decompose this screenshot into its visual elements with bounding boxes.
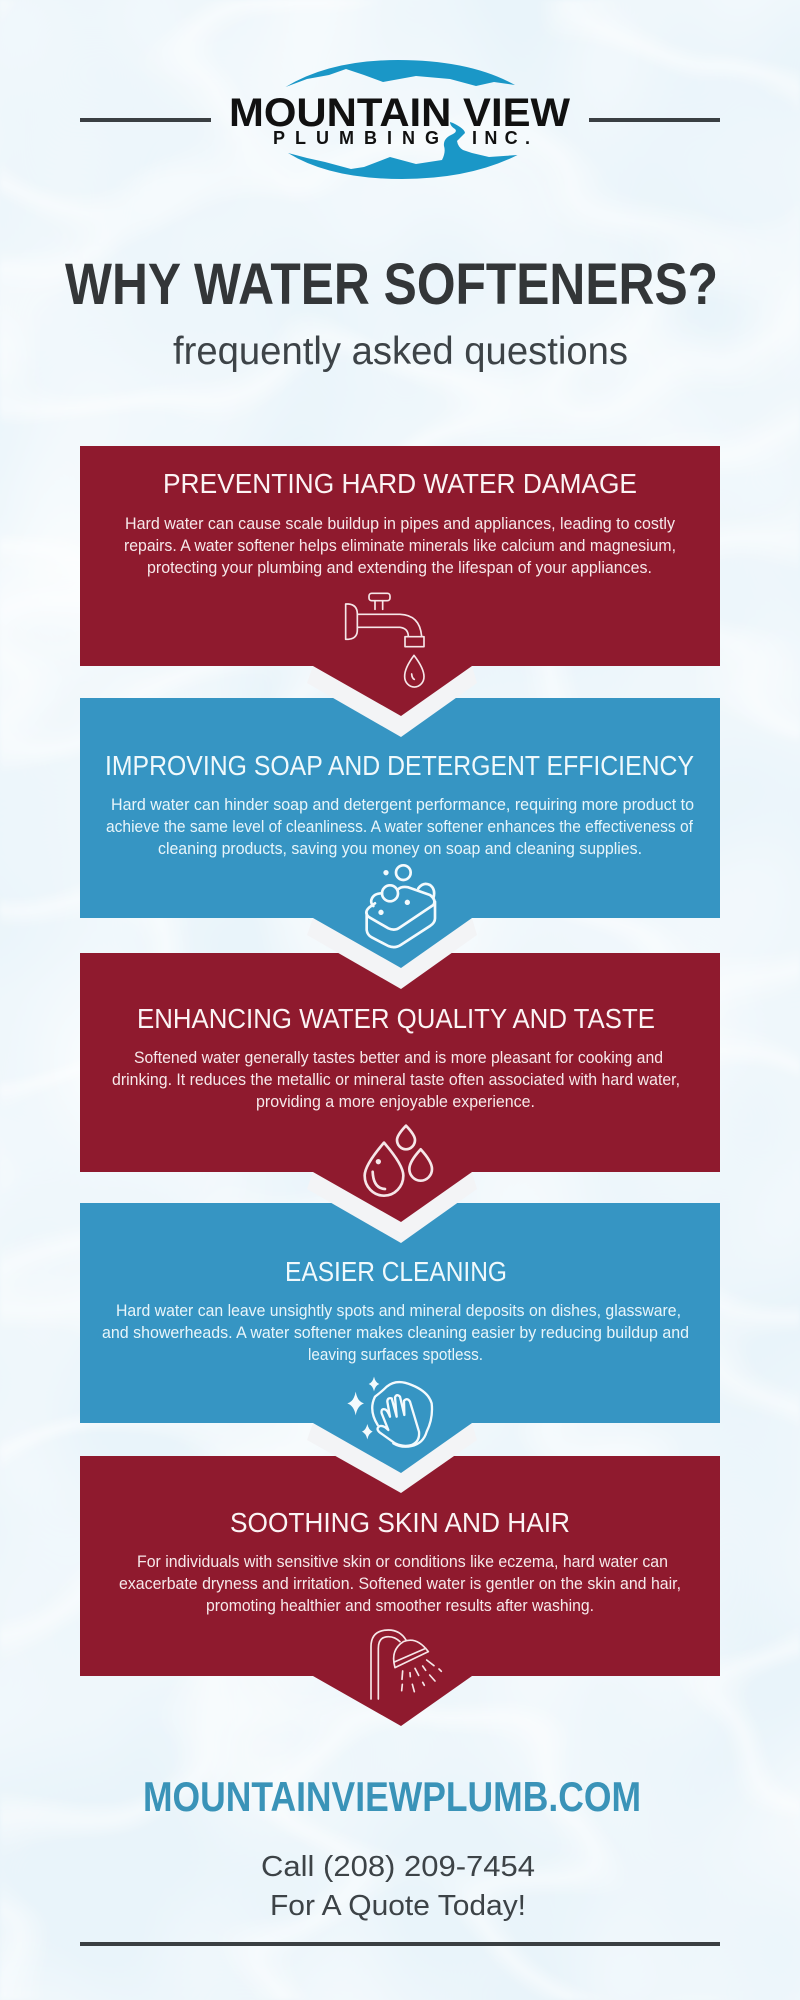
logo: Mountain View Plumbing: PLUMBING (273, 128, 439, 148)
heading: EASIER CLEANING (285, 1256, 507, 1287)
heading: IMPROVING SOAP AND DETERGENT EFFICIENCY (105, 750, 694, 781)
chevron separator 4 (307, 1423, 477, 1493)
call to action: For A Quote Today! (270, 1890, 526, 1922)
body text: drinking. It reduces the metallic or mineral taste often associated with hard water, (112, 1070, 680, 1089)
icon: shower head (371, 1630, 441, 1699)
header: logo with side rules (80, 60, 720, 179)
body text (112, 1048, 680, 1111)
body text (102, 1301, 689, 1364)
body text: Hard water can cause scale buildup in pipes and appliances, leading to costly (125, 514, 675, 533)
body text: achieve the same level of cleanliness. A water softener enhances the effectiveness of (106, 817, 693, 836)
body text: repairs. A water softener helps eliminate minerals like calcium and magnesium, (124, 536, 676, 555)
logo: Mountain View Plumbing: MOUNTAIN VIEW (229, 91, 570, 135)
body text (119, 1552, 681, 1615)
body text: cleaning products, saving you money on soap and cleaning supplies. (158, 839, 642, 858)
body text: For individuals with sensitive skin or conditions like eczema, hard water can (137, 1552, 668, 1571)
website link: MOUNTAINVIEWPLUMB.COM (143, 1773, 641, 1820)
chevron separator 1 (307, 666, 477, 737)
logo: Mountain View Plumbing: INC. (472, 128, 530, 148)
body text: exacerbate dryness and irritation. Softened water is gentler on the skin and hair, (119, 1574, 681, 1593)
icon: faucet and drop (346, 593, 424, 687)
body text: protecting your plumbing and extending the lifespan of your appliances. (147, 558, 652, 577)
panel 3: enhancing water quality and taste (80, 953, 720, 1222)
panel 2: improving soap and detergent efficiency (80, 698, 720, 968)
call to action: Call (208) 209-7454 (261, 1851, 535, 1883)
right header rule (589, 118, 720, 122)
chevron separator 2 (307, 918, 477, 989)
body text (106, 795, 694, 858)
body text: promoting healthier and smoother results after washing. (206, 1596, 594, 1615)
subtitle: frequently asked questions (173, 330, 628, 373)
panel 1: preventing hard water damage (80, 446, 720, 716)
body text: Hard water can leave unsightly spots and mineral deposits on dishes, glassware, (116, 1301, 681, 1320)
body text: and showerheads. A water softener makes cleaning easier by reducing buildup and (102, 1323, 689, 1342)
left header rule (80, 118, 211, 122)
heading: ENHANCING WATER QUALITY AND TASTE (137, 1003, 655, 1034)
logo: Mountain View Plumbing (229, 60, 570, 179)
heading: SOOTHING SKIN AND HAIR (230, 1507, 570, 1538)
icon: soap with bubbles (366, 865, 435, 947)
call to action (261, 1851, 535, 1922)
body text: providing a more enjoyable experience. (256, 1092, 535, 1111)
body text: Hard water can hinder soap and detergent performance, requiring more product to (111, 795, 694, 814)
chevron separator 3 (307, 1172, 477, 1243)
body text: leaving surfaces spotless. (308, 1345, 483, 1364)
body text (124, 514, 676, 577)
heading: PREVENTING HARD WATER DAMAGE (163, 468, 637, 499)
panel 4: easier cleaning (80, 1203, 720, 1473)
panel 5: soothing skin and hair (80, 1456, 720, 1726)
icon: water drops (365, 1126, 432, 1196)
bottom rule (80, 1942, 720, 1946)
icon: hand wiping with sparkles (347, 1377, 432, 1447)
body text: Softened water generally tastes better and is more pleasant for cooking and (134, 1048, 663, 1067)
